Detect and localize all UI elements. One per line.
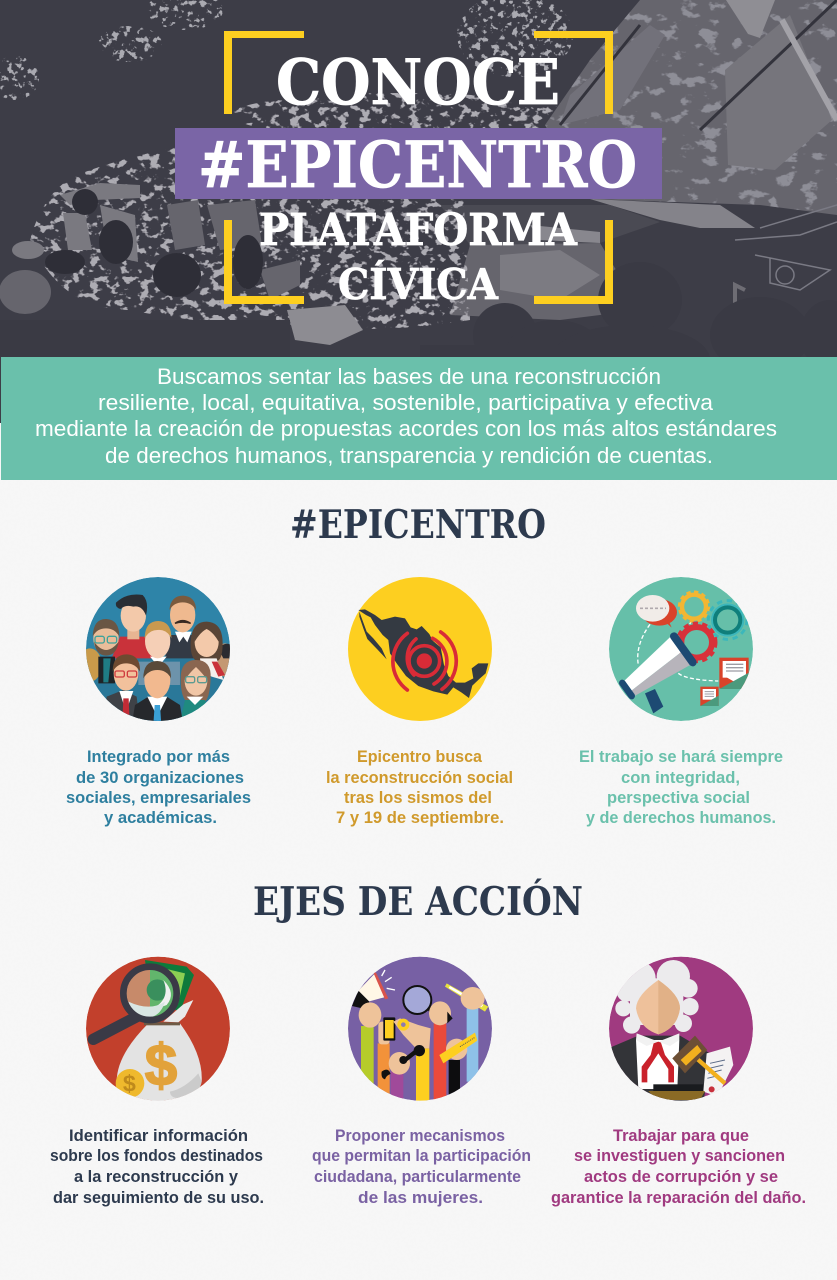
collar xyxy=(636,1033,658,1046)
teal intro band xyxy=(0,357,837,480)
collapsed building lit area xyxy=(545,0,837,215)
back right man xyxy=(165,635,194,658)
caption: accountability: actos de corrupción y se xyxy=(584,1168,778,1186)
caption: organizations: de 30 organizaciones xyxy=(76,769,244,787)
paper xyxy=(703,1047,733,1095)
back left man xyxy=(112,637,153,658)
caption: participation: que permitan la participación xyxy=(312,1147,531,1165)
teal gear xyxy=(711,603,744,637)
caption: funds: a la reconstrucción y xyxy=(74,1168,239,1186)
heading: #EPICENTRO: #EPICENTRO xyxy=(290,502,546,548)
magnifier xyxy=(428,1007,430,1012)
title xyxy=(175,45,662,309)
debris slab below band xyxy=(590,199,755,228)
rubble and wires lower right xyxy=(735,205,837,290)
caption: integrity: y de derechos humanos. xyxy=(586,809,776,827)
large envelope xyxy=(719,658,749,688)
heading: EJES DE ACCIÓN: EJES DE ACCIÓN xyxy=(253,878,583,925)
title line: epicentro: #EPICENTRO xyxy=(198,128,637,203)
caption: integrity: con integridad, xyxy=(621,769,740,787)
icon: magnifier and money bag: $ xyxy=(123,1071,136,1097)
caption: accountability: se investiguen y sancionen xyxy=(574,1147,785,1165)
caption: reconstruction: Epicentro busca xyxy=(357,748,483,766)
foreground dark heads xyxy=(206,269,737,357)
speech bubble xyxy=(642,599,677,626)
gavel xyxy=(697,1058,725,1083)
glasses man xyxy=(98,657,115,683)
tie man xyxy=(133,696,182,721)
hero photo background xyxy=(0,0,837,395)
purple banner xyxy=(175,128,662,199)
right woman xyxy=(191,622,223,662)
yellow gear xyxy=(682,595,706,619)
base of bench xyxy=(653,1084,703,1092)
small envelope xyxy=(700,687,719,706)
icon: raised hands with tools xyxy=(348,957,492,1105)
icon: judge with gavel xyxy=(608,957,753,1105)
icon: megaphone with gears xyxy=(609,577,753,721)
banknotes xyxy=(145,960,194,1012)
pencil xyxy=(445,983,488,1012)
caption: organizations: Integrado por más xyxy=(87,748,230,766)
wig xyxy=(615,960,699,1034)
seismic waves xyxy=(393,632,456,690)
title line: plataforma: PLATAFORMA xyxy=(259,205,578,256)
lighter slab faces xyxy=(725,15,832,170)
red gear xyxy=(681,627,712,658)
red glasses man xyxy=(106,690,139,718)
magnifier xyxy=(93,1015,140,1039)
icon: magnifier and money bag xyxy=(86,957,230,1102)
far right person xyxy=(218,643,230,676)
title line: cívica: CÍVICA xyxy=(338,259,499,309)
caption: organizations xyxy=(66,748,251,827)
title line: conoce: CONOCE xyxy=(276,45,560,119)
caption: accountability: Trabajar para que xyxy=(613,1127,749,1145)
caption: participation xyxy=(312,1127,531,1207)
arms xyxy=(361,1026,374,1084)
bag neck xyxy=(163,1000,193,1022)
title frame brackets xyxy=(224,31,613,304)
intro text: de derechos humanos, transparencia y rendición de cuentas. xyxy=(105,443,713,468)
crowd speckle xyxy=(30,132,470,329)
face xyxy=(636,980,680,1034)
caption: participation: ciudadana, particularmente xyxy=(314,1168,521,1186)
dollar sign: $ xyxy=(145,1033,177,1098)
caption: reconstruction xyxy=(326,748,513,827)
caption: funds: Identificar información xyxy=(69,1127,248,1145)
icon: map of Mexico with seismic waves xyxy=(348,577,492,721)
caption: reconstruction: 7 y 19 de septiembre. xyxy=(336,809,504,827)
icon: group of people xyxy=(86,577,230,721)
caption: accountability: garantice la reparación del daño. xyxy=(551,1189,806,1207)
crowd bodies xyxy=(12,183,140,262)
caption: funds xyxy=(50,1127,264,1207)
right woman with glasses xyxy=(181,660,211,702)
caption: participation: de las mujeres. xyxy=(358,1189,483,1207)
intro text xyxy=(35,364,777,468)
caption: integrity: perspectiva social xyxy=(607,789,750,807)
hands xyxy=(359,1002,381,1028)
blond man xyxy=(138,662,180,685)
coin xyxy=(116,1069,144,1098)
intro text: mediante la creación de propuestas acordes con los más altos estándares xyxy=(35,416,777,441)
caption: funds: dar seguimiento de su uso. xyxy=(53,1189,264,1207)
caption: funds: sobre los fondos destinados xyxy=(50,1147,263,1165)
wrenches xyxy=(405,1048,420,1060)
caption: integrity xyxy=(579,748,783,827)
dashed links xyxy=(638,617,718,681)
intro text: resiliente, local, equitativa, sostenible, participativa y efectiva xyxy=(98,390,713,415)
caption: organizations: y académicas. xyxy=(104,809,217,827)
ruler xyxy=(439,1033,477,1063)
caption: reconstruction: tras los sismos del xyxy=(344,789,492,807)
map xyxy=(358,609,488,698)
caption: integrity: El trabajo se hará siempre xyxy=(579,748,783,766)
robe xyxy=(608,1036,710,1105)
intro text: Buscamos sentar las bases de una reconstrucción xyxy=(157,364,661,389)
caption: organizations: sociales, empresariales xyxy=(66,789,251,807)
caption: participation: Proponer mecanismos xyxy=(335,1127,505,1145)
foliage speckle xyxy=(98,26,162,62)
caption: accountability xyxy=(551,1127,806,1207)
caption: reconstruction: la reconstrucción social xyxy=(326,769,513,787)
money bag xyxy=(117,1023,202,1102)
red tie xyxy=(642,1042,674,1082)
megaphone xyxy=(645,689,663,713)
dark heads xyxy=(45,189,263,297)
megaphone xyxy=(359,974,384,1002)
